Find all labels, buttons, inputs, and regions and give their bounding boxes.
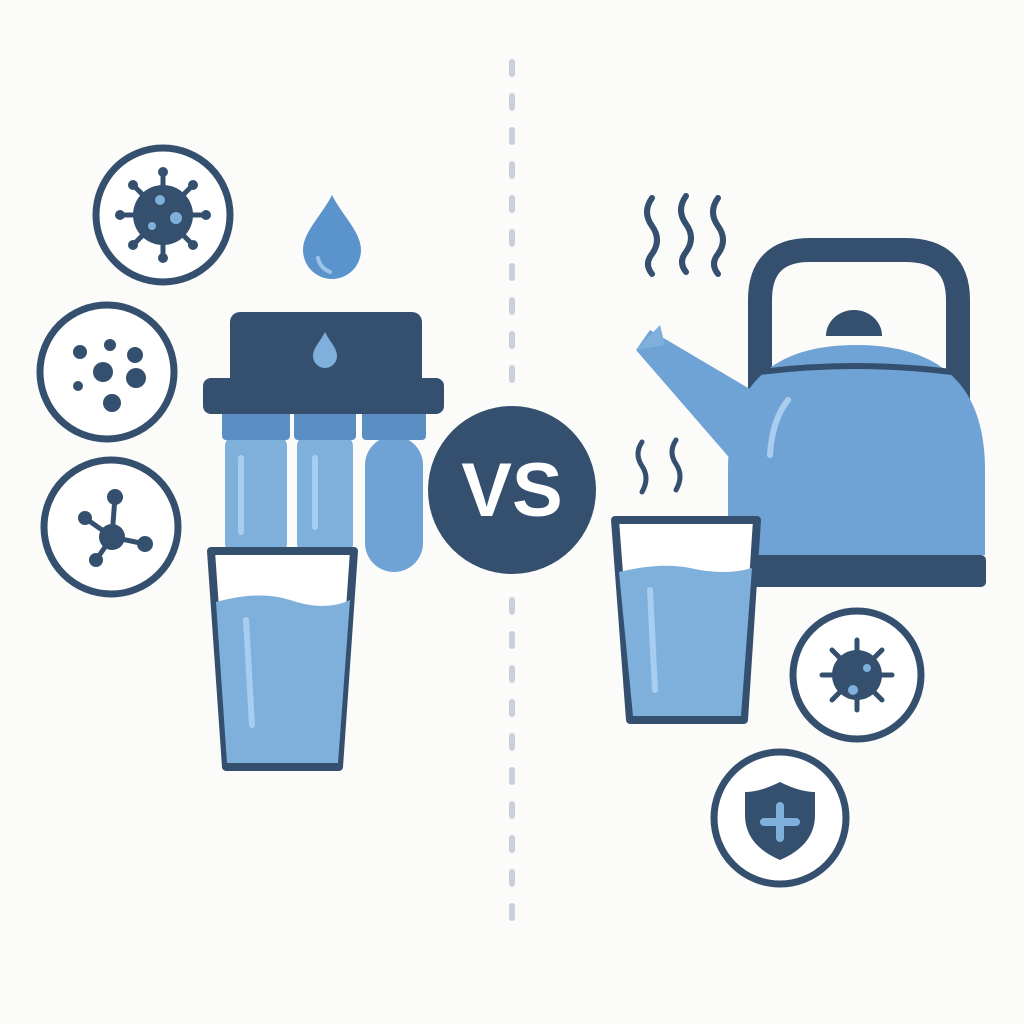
icon: small steam [638,440,680,492]
icon: virus circle right [793,611,921,739]
icon: molecule circle [44,460,178,594]
glass right [615,520,757,720]
icon: steam [647,196,723,274]
icon: virus circle left [96,148,230,282]
glass left [211,551,354,767]
icon: particles circle [40,305,174,439]
icon: water drop [303,195,361,279]
kettle [636,250,986,587]
icon: shield circle [714,752,846,884]
water filter [203,312,444,572]
VS badge: VS [461,448,563,533]
VS badge [428,406,596,574]
